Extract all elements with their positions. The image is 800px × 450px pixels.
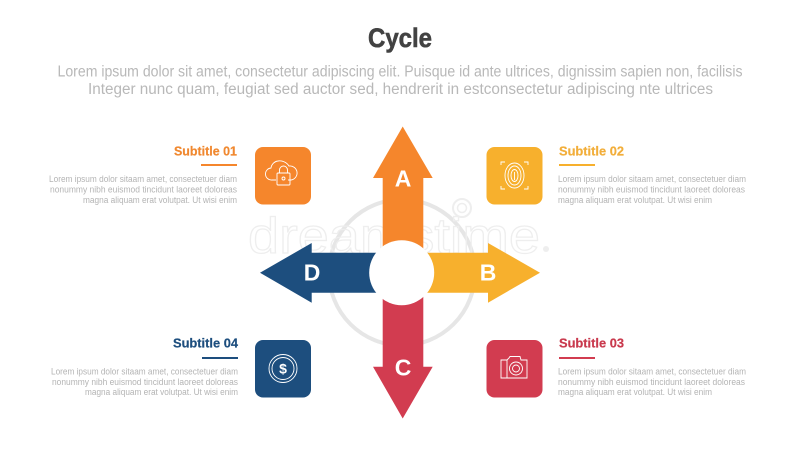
body 01: nonummy nibh euismod tincidunt laoreet doloreas — [50, 184, 238, 194]
intro text: Lorem ipsum dolor sit amet, consectetur adipiscing elit. Puisque id ante ultrices, dignissim sapien non, facilisis — [58, 64, 743, 80]
title: Cycle — [368, 23, 432, 53]
body 03 — [558, 366, 746, 397]
heading 04: Subtitle 04 — [173, 336, 238, 350]
body 02: Lorem ipsum dolor sitaam amet, consectetuer diam — [558, 174, 746, 184]
arrow A — [373, 126, 433, 250]
body 04: Lorem ipsum dolor sitaam amet, consectetuer diam — [51, 366, 238, 376]
body 01: magna aliquam erat volutpat. Ut wisi enim — [83, 195, 237, 205]
body 04: magna aliquam erat volutpat. Ut wisi enim — [85, 387, 238, 397]
arrow B — [420, 243, 540, 303]
body 01: Lorem ipsum dolor sitaam amet, consectetuer diam — [49, 174, 237, 184]
icon: cloud lock — [255, 147, 311, 204]
heading 02: Subtitle 02 — [559, 144, 624, 158]
letter A: A — [395, 166, 411, 192]
background ring — [329, 200, 475, 346]
panel: subtitle 02 — [558, 144, 746, 205]
body 03: nonummy nibh euismod tincidunt laoreet doloreas — [558, 377, 746, 387]
heading 03: Subtitle 03 — [559, 336, 624, 350]
icon: dollar coin — [255, 340, 311, 398]
heading 01: Subtitle 01 — [174, 144, 237, 158]
letter C: C — [395, 354, 411, 380]
watermark: dreamstime — [248, 208, 540, 264]
body 02: nonummy nibh euismod tincidunt laoreet doloreas — [558, 184, 746, 194]
arrow C — [373, 295, 433, 418]
letter D: D — [304, 260, 320, 286]
body 01 — [49, 174, 238, 205]
body 03: magna aliquam erat volutpat. Ut wisi enim — [558, 387, 712, 397]
center circle — [369, 240, 434, 305]
arrow D — [260, 243, 385, 303]
panel: subtitle 01 — [49, 144, 238, 205]
letter B: B — [480, 260, 496, 286]
body 04: nonummy nibh euismod tincidunt laoreet doloreas — [52, 377, 239, 387]
panel: subtitle 04 — [51, 336, 239, 397]
icon: dollar coin: $ — [279, 360, 287, 376]
intro text: Integer nunc quam, feugiat sed auctor sed, hendrerit in estconsectetur adipiscing nte ultrices — [88, 81, 713, 98]
panel: subtitle 03 — [558, 336, 746, 397]
body 04 — [51, 366, 239, 397]
intro text — [58, 64, 743, 98]
body 02: magna aliquam erat volutpat. Ut wisi enim — [558, 195, 712, 205]
icon: fingerprint — [486, 147, 542, 204]
icon: camera — [486, 340, 542, 398]
body 02 — [558, 174, 746, 205]
body 03: Lorem ipsum dolor sitaam amet, consectetuer diam — [558, 366, 746, 376]
